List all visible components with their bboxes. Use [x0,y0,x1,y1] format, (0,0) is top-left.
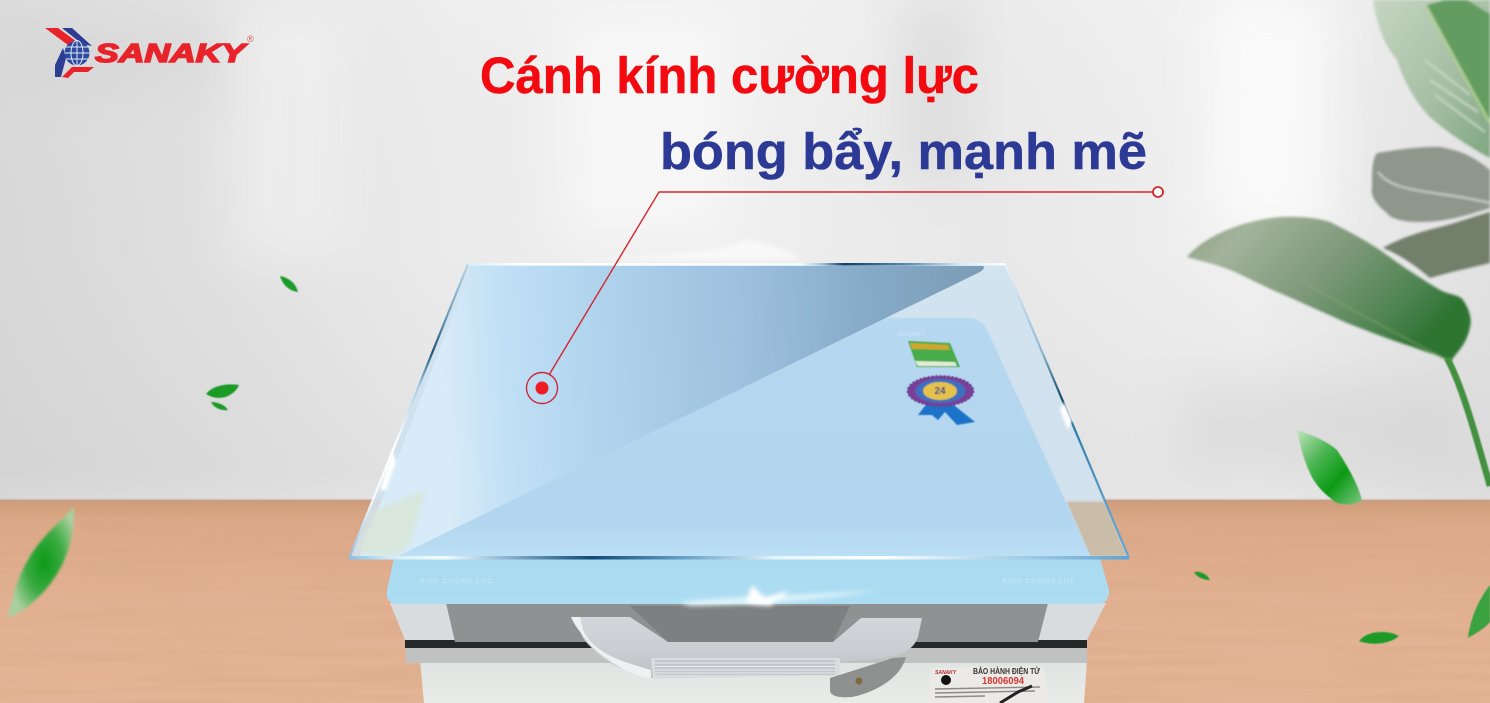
lid engraved text: KÍNH CƯỜNG LỰC [1003,576,1075,585]
dark glass reflection [360,266,984,556]
glass right edge [1005,264,1129,558]
background wall [0,0,1490,503]
grey lid front [390,603,1106,640]
engraved brand: SANAKY [897,331,926,338]
corner tint [358,490,425,555]
callout target [526,372,558,404]
logo globe [64,40,90,66]
warranty sticker: SANAKY [935,670,957,676]
warranty badge [908,376,975,425]
warranty badge: 24 [934,386,946,397]
lid glare [680,585,880,606]
leaf [1359,632,1399,644]
glass bottom edge [350,556,1129,560]
leaf [1194,572,1210,580]
recess shade behind handle [630,606,850,642]
plant [1187,0,1490,486]
heading line 2: bóng bẩy, mạnh mẽ [660,123,1147,180]
callout end dot [1153,187,1163,197]
inner lid panel [380,318,1091,557]
left edge glare [380,450,396,490]
floor seen through glass [1067,502,1127,556]
logo chevrons [45,28,80,48]
top glare [560,240,800,260]
blue lid [387,558,1109,604]
large leaf [1187,217,1471,362]
heading line 1: Cánh kính cường lực [480,47,979,104]
warranty sticker [927,666,1050,703]
glass left edge [349,264,468,559]
middle leaves [1372,147,1490,278]
warranty sticker: 18006094 [982,676,1024,687]
black gasket [405,640,1087,648]
logo: SANAKY [45,28,254,78]
energy label [908,341,960,367]
stem [1447,358,1490,486]
glass surface [349,264,1129,559]
logo wordmark: SANAKY [95,38,249,68]
tempered glass panel [349,240,1129,560]
lid engraved text [420,576,1075,585]
handle [571,617,922,679]
leaf [280,276,298,292]
leaf [206,384,239,398]
leaf [211,402,228,410]
leaf [8,507,74,618]
lock [830,657,906,697]
top leaf [1373,0,1490,158]
registered mark: ® [247,34,254,44]
freezer body [420,660,1087,703]
lid engraved text: KÍNH CƯỜNG LỰC [420,576,492,585]
freezer [387,558,1109,703]
leaf [1297,430,1362,504]
wooden floor [0,499,1490,703]
warranty sticker: BẢO HÀNH ĐIỆN TỬ [973,667,1040,676]
callout leader line [526,187,1163,404]
upper band [406,646,1087,663]
right glare [1060,402,1072,430]
leaf [1468,585,1490,638]
glass top edge [468,263,1005,266]
falling leaves [8,276,1490,644]
